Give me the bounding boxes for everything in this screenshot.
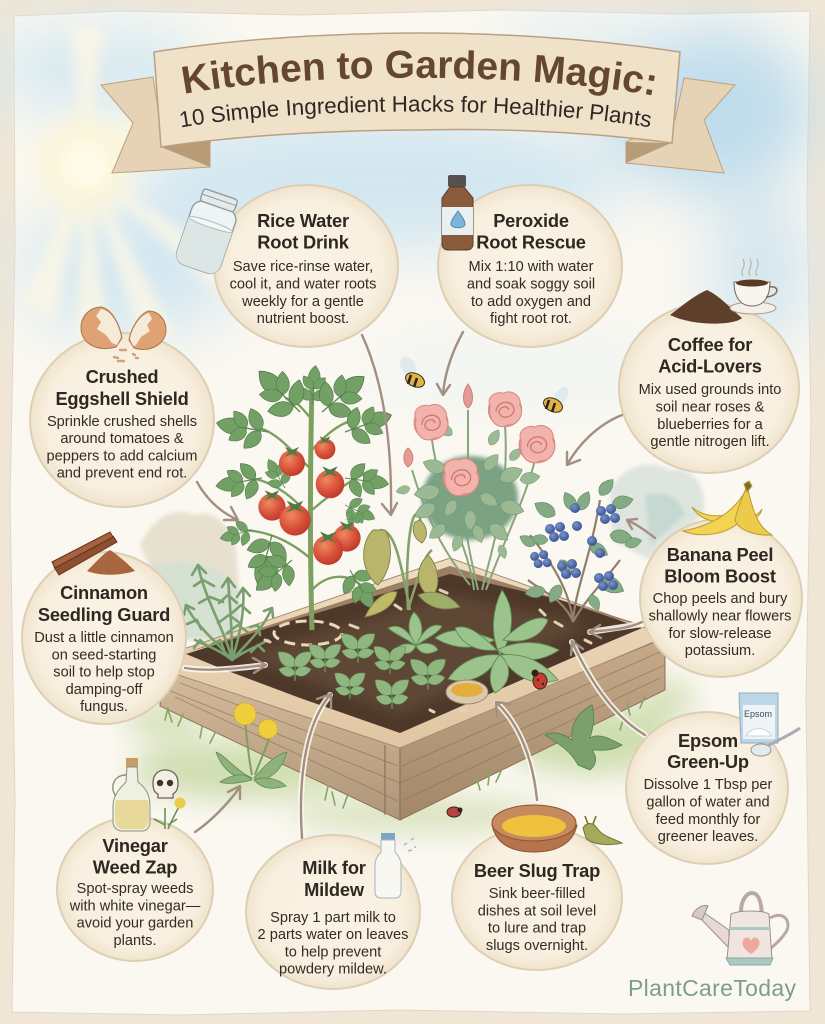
text: cinnamon: soil to help stop xyxy=(53,665,155,681)
spinach plants xyxy=(388,590,559,693)
heading: cinnamon: Seedling Guard xyxy=(38,604,170,625)
panel: milk xyxy=(246,835,420,989)
blueberry bush xyxy=(517,476,643,622)
icon: epsom bag and spoon xyxy=(739,693,800,756)
text: eggshell: around tomatoes & xyxy=(60,431,184,447)
arrow: rice water to wilted plant xyxy=(362,335,397,515)
seedlings xyxy=(274,629,450,709)
heading: vinegar: Vinegar xyxy=(102,835,168,856)
panel: coffee xyxy=(619,303,799,473)
arrow: banana to blueberry xyxy=(627,519,655,538)
text: banana: for slow-release xyxy=(668,626,772,642)
heading: beer: Beer Slug Trap xyxy=(474,860,600,881)
rose bush xyxy=(395,384,555,590)
icon: peroxide bottle xyxy=(442,175,473,250)
panel: banana xyxy=(640,519,802,677)
text: milk: Spray 1 part milk to xyxy=(270,910,396,926)
text: epsom: greener leaves. xyxy=(658,829,758,845)
text: coffee: gentle nitrogen lift. xyxy=(650,434,770,450)
heading: milk: Milk for xyxy=(302,857,366,878)
text: eggshell: Sprinkle crushed shells xyxy=(47,414,197,430)
background trees xyxy=(140,465,704,640)
text: vinegar: with white vinegar— xyxy=(69,898,201,914)
icon: coffee cup and grounds xyxy=(670,259,777,324)
panel: beer xyxy=(452,826,622,970)
raised garden bed xyxy=(160,558,668,820)
arrow: cinnamon to seedlings xyxy=(185,658,266,673)
ribbon body xyxy=(154,33,680,147)
text: beer: dishes at soil level xyxy=(478,903,596,919)
text: eggshell: peppers to add calcium xyxy=(47,448,197,464)
watercolor sky xyxy=(0,23,815,400)
text: peroxide: to add oxygen and xyxy=(471,294,591,310)
text: milk: powdery mildew. xyxy=(279,962,387,978)
ladybug on ground xyxy=(447,807,462,817)
arrow: milk to seedlings xyxy=(301,694,331,838)
heading: coffee: Coffee for xyxy=(668,334,752,355)
text: vinegar: plants. xyxy=(114,933,156,949)
arrow: banana to soil xyxy=(589,622,642,638)
grass wash xyxy=(125,678,695,833)
icon: glass jar xyxy=(174,187,243,276)
eggshell ring xyxy=(274,621,342,645)
heading: milk: Mildew xyxy=(304,879,365,900)
left wall xyxy=(160,670,400,820)
text: peroxide: Mix 1:10 with water xyxy=(469,259,593,275)
icon: cinnamon sticks and powder xyxy=(52,532,135,575)
text: peroxide: and soak soggy soil xyxy=(467,276,595,292)
text: beer: slugs overnight. xyxy=(486,938,588,954)
weed leaf xyxy=(545,705,622,770)
text: eggshell: and prevent end rot. xyxy=(57,466,187,482)
rim xyxy=(163,558,668,748)
icon: beer dish xyxy=(492,805,577,852)
icon: banana peel xyxy=(683,481,772,535)
arrow: beer to bowl xyxy=(496,702,537,800)
heading: peroxide: Root Rescue xyxy=(476,232,586,252)
dandelion xyxy=(216,703,287,788)
text: cinnamon: damping-off xyxy=(66,682,143,698)
text: cinnamon: fungus. xyxy=(80,699,128,715)
soil xyxy=(186,574,642,733)
text: banana: Chop peels and bury xyxy=(653,591,787,607)
main title: Kitchen to Garden Magic: xyxy=(182,50,655,96)
arrow: peroxide to rose xyxy=(437,332,463,395)
text: vinegar: avoid your garden xyxy=(77,916,193,932)
icon: skull and small weed xyxy=(153,770,186,829)
heading: eggshell: Eggshell Shield xyxy=(55,388,189,409)
heading: banana: Bloom Boost xyxy=(664,566,776,586)
icon: epsom bag and spoon: Epsom xyxy=(744,709,772,719)
panel: vinegar xyxy=(57,817,213,961)
heading: eggshell: Crushed xyxy=(86,366,158,387)
right ribbon tail xyxy=(626,78,735,173)
icon: watering can xyxy=(692,893,788,965)
tomatoes xyxy=(258,436,361,565)
wilted plant xyxy=(364,514,460,617)
panel: eggshell xyxy=(30,333,214,507)
grass tufts xyxy=(165,696,645,808)
logo: PlantCareToday xyxy=(628,975,796,1001)
banner title xyxy=(100,32,736,174)
text: banana: potassium. xyxy=(685,643,755,659)
panel: epsom xyxy=(626,712,788,864)
left ribbon tail xyxy=(101,77,210,173)
subtitle: 10 Simple Ingredient Hacks for Healthier Plants xyxy=(180,95,651,128)
heading: vinegar: Weed Zap xyxy=(93,856,177,878)
text: beer: Sink beer-filled xyxy=(489,886,585,902)
arrow: eggshell to tomato xyxy=(197,482,238,520)
inner back wall xyxy=(187,566,646,652)
arrow: epsom to bed xyxy=(571,641,645,735)
icon: vinegar bottle xyxy=(113,758,150,831)
icon: cracked eggshells xyxy=(81,307,166,361)
panel: peroxide xyxy=(438,185,622,347)
arrow: vinegar to dandelion xyxy=(195,786,240,832)
text: beer: to lure and trap xyxy=(488,921,586,937)
text: banana: shallowly near flowers xyxy=(649,608,791,624)
heading: coffee: Acid-Lovers xyxy=(658,356,762,376)
heading: epsom: Epsom xyxy=(678,730,738,751)
icon: milk bottle xyxy=(375,833,416,898)
heading: epsom: Green-Up xyxy=(667,751,749,772)
text: milk: 2 parts water on leaves xyxy=(258,927,408,943)
text: epsom: feed monthly for xyxy=(656,812,760,828)
text: rice water: Save rice-rinse water, xyxy=(233,259,373,275)
text: milk: to help prevent xyxy=(285,944,381,960)
panel: rice water xyxy=(214,185,398,347)
heading: rice water: Root Drink xyxy=(257,232,350,252)
text: epsom: gallon of water and xyxy=(646,794,770,810)
heading: cinnamon: Cinnamon xyxy=(60,582,148,603)
tomato plant xyxy=(212,353,399,630)
text: coffee: soil near roses & xyxy=(656,399,765,415)
bee right xyxy=(541,384,572,415)
text: cinnamon: Dust a little cinnamon xyxy=(34,630,174,646)
panel: cinnamon xyxy=(22,552,186,724)
text: cinnamon: on seed-starting xyxy=(52,647,156,663)
heading: rice water: Rice Water xyxy=(257,210,349,231)
bee left xyxy=(397,354,427,390)
text: rice water: cool it, and water roots xyxy=(230,276,376,292)
heading: peroxide: Peroxide xyxy=(493,210,569,231)
text: peroxide: fight root rot. xyxy=(490,311,572,327)
small beer dish xyxy=(446,680,488,704)
soil speckles xyxy=(265,590,591,712)
icon: slug xyxy=(583,816,622,845)
text: coffee: blueberries for a xyxy=(657,417,764,433)
text: coffee: Mix used grounds into xyxy=(639,382,781,398)
ladybug xyxy=(532,670,547,689)
heading: banana: Banana Peel xyxy=(667,544,773,565)
arrow: coffee to blueberry xyxy=(567,415,622,465)
sun xyxy=(22,25,240,350)
text: vinegar: Spot-spray weeds xyxy=(77,881,193,897)
text: rice water: nutrient boost. xyxy=(257,311,349,327)
text: rice water: weekly for a gentle xyxy=(241,294,364,310)
text: epsom: Dissolve 1 Tbsp per xyxy=(644,777,772,793)
arrows xyxy=(185,332,655,838)
right wall xyxy=(400,638,665,820)
herb plant xyxy=(184,565,273,660)
